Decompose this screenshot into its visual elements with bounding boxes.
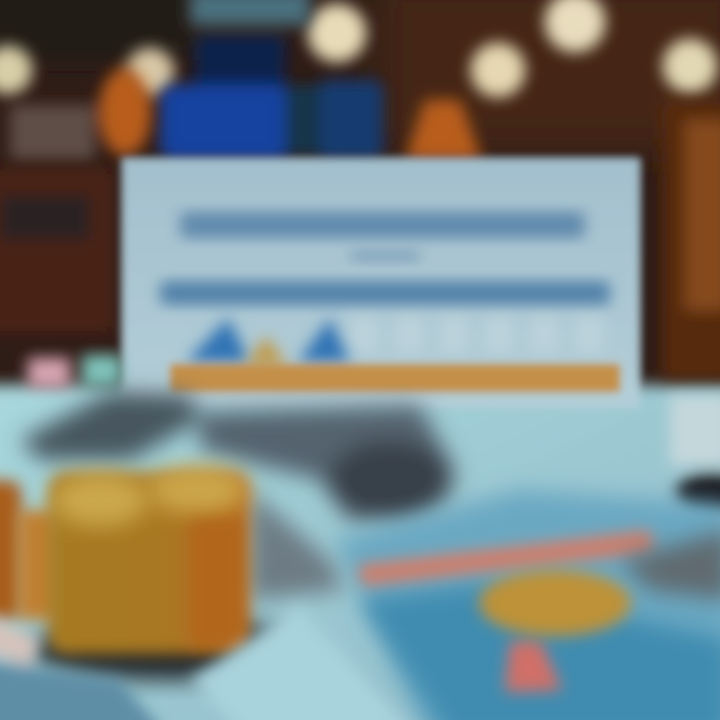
icon: stack of gold coins bbox=[0, 466, 250, 654]
right shelf bbox=[662, 100, 720, 380]
background: table surface bbox=[0, 385, 720, 720]
icon: flat gold coin on the paper bbox=[479, 570, 631, 636]
blue bottles behind the panel bbox=[160, 0, 383, 160]
shadow under the coins bbox=[30, 620, 310, 680]
chart line: red stripe bbox=[358, 530, 655, 586]
icon: gold marker bbox=[244, 336, 288, 366]
grey reflection beside coins bbox=[250, 490, 345, 600]
panel: infographic board bbox=[122, 158, 640, 408]
bar: orange highlight bbox=[170, 364, 620, 392]
grey pen at right bbox=[620, 530, 720, 600]
table columns: faint cells bbox=[350, 318, 603, 352]
striped paper in the foreground bbox=[0, 605, 420, 720]
blue paper chart bbox=[335, 490, 720, 720]
background: dark wooden wall bbox=[0, 0, 720, 420]
text block: blurred middle word bbox=[350, 250, 420, 262]
orange bottles behind the panel bbox=[10, 68, 482, 160]
text block: blurred subtitle line bbox=[160, 281, 610, 305]
sticky notes at left of the table bbox=[28, 355, 122, 388]
bokeh ceiling lights bbox=[0, 0, 717, 97]
dark device on the table bbox=[20, 392, 455, 522]
left shelf bbox=[0, 168, 114, 333]
right table object bbox=[670, 395, 720, 512]
icon: blue chevron marks bbox=[186, 318, 350, 362]
heading: blurred title line bbox=[180, 212, 585, 238]
chart marker: pink wedge bbox=[505, 640, 562, 692]
